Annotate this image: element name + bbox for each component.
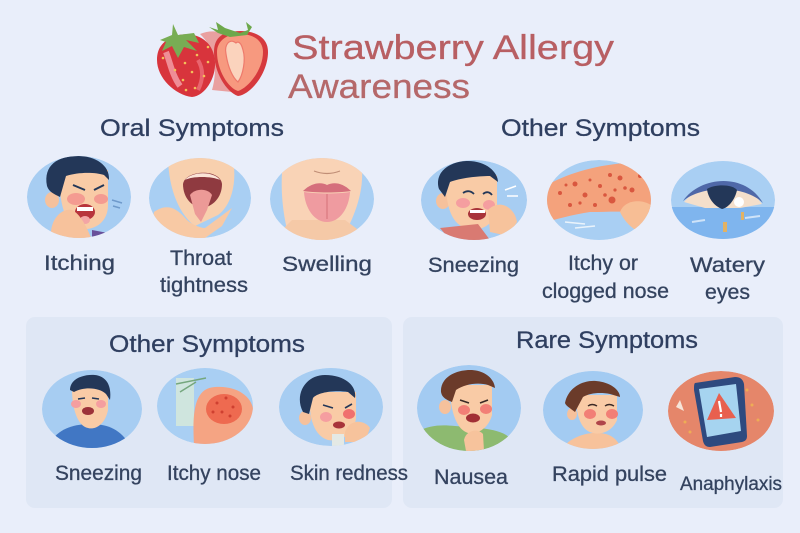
heading: other symptoms upper right: Other Symptoms [501, 115, 700, 142]
title [288, 29, 614, 106]
label: watery eyes [690, 254, 766, 304]
label: rapid pulse: Rapid pulse [552, 463, 667, 486]
label: skin redness: Skin redness [290, 462, 408, 485]
icon: itching boy [27, 156, 131, 240]
icon: boy with tissue [279, 368, 383, 448]
title: Awareness [288, 68, 470, 106]
heading: oral symptoms: Oral Symptoms [100, 115, 284, 142]
panel: rare symptoms [403, 317, 783, 508]
label: swelling: Swelling [282, 253, 372, 276]
label: itchy or clogged nose: Itchy or [568, 252, 638, 275]
label: throat tightness [160, 247, 248, 297]
icon: sneezing boy [421, 160, 527, 240]
icon: watery eye [671, 161, 775, 241]
label: sneezing lower: Sneezing [55, 462, 142, 485]
title: Strawberry Allergy [292, 29, 614, 67]
label: itchy or clogged nose: clogged nose [542, 280, 669, 303]
label: itchy nose: Itchy nose [167, 462, 261, 485]
heading: other symptoms lower left: Other Symptoms [109, 331, 305, 358]
icon: skin rash with glass [157, 368, 253, 445]
label: throat tightness: Throat [170, 247, 232, 270]
heading: rare symptoms: Rare Symptoms [516, 327, 698, 354]
icon: nauseous boy [417, 365, 521, 455]
label: itching: Itching [44, 252, 115, 275]
label: throat tightness: tightness [160, 274, 248, 297]
label: watery eyes: Watery [690, 254, 766, 277]
icon: strawberries [157, 22, 268, 97]
icon: swelling lips [270, 155, 374, 240]
label: watery eyes: eyes [705, 281, 750, 304]
icon: boy rapid pulse [543, 371, 643, 450]
panel: other symptoms (lower left) [26, 317, 392, 508]
icon: phone with warning [668, 371, 774, 451]
label: anaphylaxis: Anaphylaxis [680, 474, 782, 495]
label: nausea: Nausea [434, 466, 508, 489]
label: sneezing upper: Sneezing [428, 254, 519, 277]
icon: rash on skin [545, 160, 656, 240]
icon: man in blue shirt [42, 370, 142, 450]
icon: open mouth throat [149, 155, 251, 238]
label: itchy or clogged nose [542, 252, 669, 303]
